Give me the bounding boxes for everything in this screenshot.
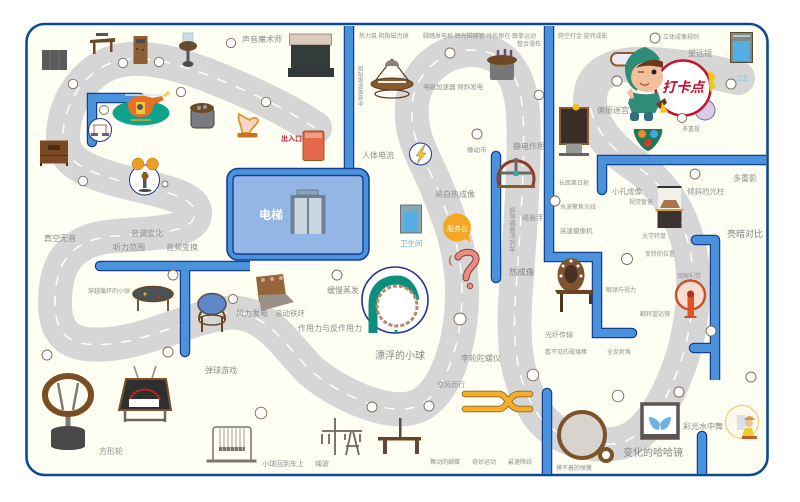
label: 李轮陀螺仪 bbox=[461, 353, 501, 363]
label: 眼球与视力 bbox=[606, 286, 636, 294]
icon: blue door bbox=[730, 32, 752, 62]
icon: yellow clamp bbox=[465, 394, 530, 409]
icon: large display machine bbox=[288, 34, 334, 77]
stops: white route dots bbox=[42, 33, 756, 419]
icon: blue stool bbox=[198, 294, 226, 332]
icon: water dispenser table bbox=[179, 33, 197, 67]
label: 穿越循环的小球 bbox=[88, 287, 130, 295]
label: 长距离日射 bbox=[559, 179, 589, 187]
elevator room bbox=[227, 168, 369, 260]
icon: round balance exhibit bbox=[88, 118, 112, 142]
label: 绳波 bbox=[315, 459, 329, 468]
icon: harp bbox=[238, 114, 258, 138]
label: 听力范围 bbox=[113, 242, 145, 252]
icon: elevator doors bbox=[290, 190, 326, 234]
icon: score board bbox=[559, 104, 589, 156]
icon: round tabletop bbox=[133, 286, 173, 311]
label: small restroom: 卫生 bbox=[736, 73, 750, 82]
icon: drum with bottles bbox=[487, 49, 517, 80]
label: 漂浮的小球 bbox=[375, 349, 425, 362]
label: 倾斜的光柱 bbox=[687, 186, 725, 196]
label: 磁悬浮 bbox=[522, 213, 543, 222]
icon: restroom door bbox=[400, 205, 422, 233]
label: 音调变化 bbox=[131, 228, 163, 238]
label: 全反射角 bbox=[607, 348, 631, 356]
label: 黑白热成像 bbox=[435, 189, 475, 199]
label: 立体成像规则 bbox=[663, 33, 699, 41]
label: 奇妙运动 bbox=[472, 458, 496, 466]
icon: round mirror bbox=[559, 412, 612, 461]
label: 双眼视觉 bbox=[677, 272, 701, 280]
label: 橡动市 bbox=[467, 145, 487, 154]
icon: entrance door bbox=[303, 131, 324, 160]
label: 热成像 bbox=[509, 267, 535, 277]
icon: pulley stand bbox=[322, 418, 362, 455]
labels: left road bbox=[44, 228, 425, 468]
label: 卫生间 bbox=[400, 238, 422, 248]
icon: wooden board bbox=[256, 274, 294, 311]
icon: black table with arch bbox=[119, 366, 171, 422]
label: 音频变换 bbox=[166, 242, 198, 252]
label: 作用力与反作用力 bbox=[298, 323, 362, 333]
label: 光学转盘 bbox=[642, 232, 666, 240]
label: 脚踏发电机 辉光磁碟管 冷热原在 跟拳运动 bbox=[423, 32, 536, 40]
label: 看不见的玻璃棒 bbox=[545, 348, 587, 356]
label: 风力发电 bbox=[236, 308, 268, 318]
label: 光纤传输 bbox=[545, 330, 573, 339]
walls: blue partitions bbox=[92, 20, 775, 480]
icon: steering wheel bbox=[497, 158, 535, 188]
icon: parabolic dish exhibit bbox=[130, 158, 160, 195]
icon: drum bbox=[190, 103, 214, 128]
label: entrance: 出入口 bbox=[281, 134, 302, 143]
label: 多重影 bbox=[733, 173, 757, 183]
label: 缓慢蒸发 bbox=[327, 285, 359, 295]
label: 多重投 bbox=[682, 125, 700, 133]
label: 阴阳等温等容中 bbox=[356, 65, 363, 108]
label: 最速降线 bbox=[508, 458, 532, 466]
icon: service desk bubble: 服务台 bbox=[447, 224, 468, 233]
label: 真空无音 bbox=[44, 233, 76, 243]
icon: small table bbox=[378, 418, 421, 454]
label: 弹球游戏 bbox=[205, 365, 237, 375]
label: 人体电流 bbox=[362, 150, 394, 160]
label: 滚动铁环 bbox=[275, 308, 305, 318]
icon: billiard triangle bbox=[634, 129, 662, 151]
label: 方形轮 bbox=[99, 446, 123, 456]
label: 望远镜 bbox=[688, 48, 712, 58]
elevator label: 电梯 bbox=[259, 207, 283, 222]
icon: wooden gyro ring bbox=[45, 376, 91, 450]
label: 亮暗对比 bbox=[727, 228, 763, 239]
label: 电磁加速器 倾斜发电 bbox=[423, 82, 484, 91]
icon: newton cradle bbox=[207, 427, 256, 462]
label: 小球回到车上 bbox=[262, 459, 304, 468]
road: main winding route bbox=[55, 50, 738, 444]
label: 爬空打金 旋转成影 bbox=[558, 32, 608, 40]
label: 热力泵 阴阳磁力球 bbox=[359, 32, 409, 40]
icon: girl in circle bbox=[726, 406, 758, 439]
label: 彩光水中舞 bbox=[683, 421, 723, 431]
icon: lightning bbox=[410, 143, 432, 165]
icon: pool balls bbox=[638, 130, 658, 147]
label: 水波聚焦光线 bbox=[560, 203, 596, 211]
label: sound magician: 声音魔术师 bbox=[242, 34, 282, 44]
icon: folding screen bbox=[42, 50, 67, 70]
icon: vanity mirror table bbox=[555, 258, 594, 312]
icon: question mark bbox=[450, 252, 476, 289]
label: 舞动的蝴蝶 bbox=[430, 458, 460, 466]
icon: radio cabinet bbox=[40, 140, 68, 166]
icon: helicopter on teal pad bbox=[112, 92, 170, 126]
icon: display cabinet bbox=[656, 186, 684, 228]
label: 小孔成像 bbox=[612, 186, 642, 196]
label: 摸不着的弹簧 bbox=[556, 464, 592, 472]
icon: chandelier bbox=[371, 59, 413, 98]
badge: check-in bbox=[656, 60, 716, 120]
label: 静电作用 bbox=[513, 141, 545, 151]
icon: capsule sign bbox=[611, 53, 641, 66]
labels: right area bbox=[545, 32, 763, 472]
mascot character bbox=[625, 47, 668, 121]
icon: workbench bbox=[90, 33, 115, 54]
label: 逆风而行 bbox=[437, 380, 465, 389]
label: 变转的位置 bbox=[645, 250, 675, 258]
label: 视觉暂留 bbox=[629, 198, 653, 206]
labels: centre area bbox=[356, 32, 545, 466]
badge: check-in: 打卡点 bbox=[662, 79, 706, 95]
icon: orange wheel bbox=[676, 280, 705, 318]
icon: service desk bubble bbox=[443, 214, 471, 242]
label: 翻转望远镜 bbox=[640, 310, 670, 318]
label: 变化的哈哈镜 bbox=[623, 446, 683, 459]
icon: floating ball loop bbox=[362, 267, 428, 333]
label: 整合滑布 bbox=[517, 40, 541, 48]
icon: butterfly frame bbox=[641, 404, 679, 439]
label: 偏振迷宫 bbox=[597, 105, 629, 115]
label: 超导磁悬浮列车 bbox=[508, 206, 516, 254]
label: 高速摄像机 bbox=[560, 226, 593, 235]
icon: cabinet bbox=[134, 36, 148, 64]
